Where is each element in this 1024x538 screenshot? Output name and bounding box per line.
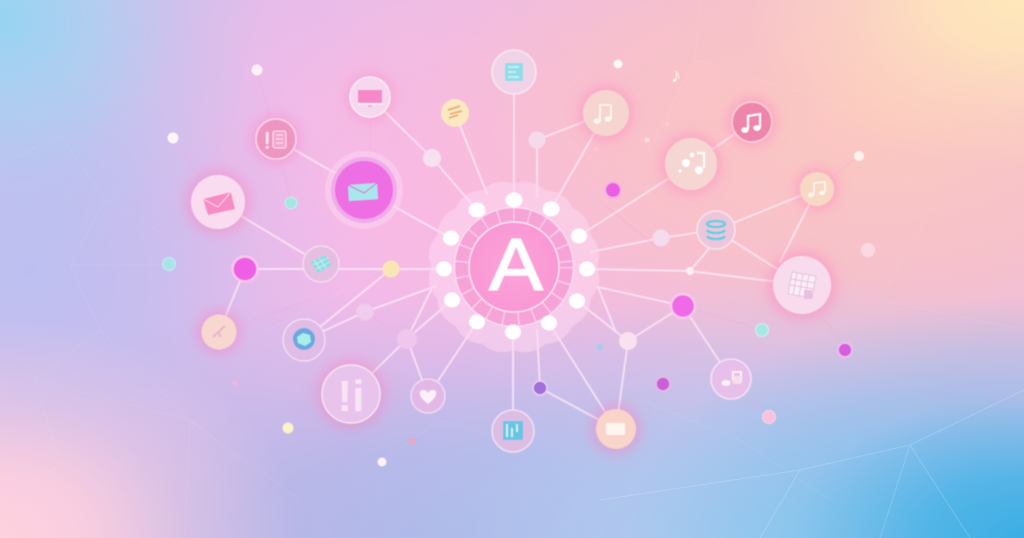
- central hub: [429, 182, 599, 352]
- small accent dots: [162, 60, 875, 466]
- node: magenta upper: [605, 182, 621, 198]
- node: clipboard icon: [256, 119, 296, 159]
- node: magenta left: [232, 256, 258, 282]
- hub white nodes: [436, 192, 595, 340]
- node: peach small music: [800, 172, 834, 206]
- node: bottom book: [492, 410, 534, 452]
- hub scalloped halo: [429, 182, 599, 352]
- node: monitor: [350, 77, 390, 117]
- hub letter: A: [489, 225, 544, 306]
- node: heart: [411, 379, 445, 413]
- icon: floating music note: ♪: [671, 65, 681, 87]
- node: peach wand: [202, 314, 236, 350]
- faint secondary lines: [173, 70, 859, 417]
- node: calendar large: [773, 256, 831, 314]
- node: database stack: [697, 211, 735, 249]
- connector lines: [218, 72, 817, 431]
- node: yellow icon: [441, 99, 469, 127]
- node: large mail: [325, 151, 403, 229]
- node: pink mail: [191, 175, 245, 229]
- node: pink music: [732, 102, 772, 142]
- node: purple music: [711, 359, 751, 399]
- node: magenta right: [671, 294, 695, 318]
- node: exclamation info: [322, 365, 380, 423]
- node: grid icon: [303, 246, 339, 282]
- node: top book icon: [492, 50, 536, 94]
- node: exclamation info: !i: [338, 372, 364, 421]
- faint lower-right network lines: [600, 390, 1024, 538]
- node: yellow junction: [382, 260, 400, 278]
- node: peach bottom: [596, 409, 636, 449]
- network diagram: [162, 50, 875, 466]
- hub segmented ring: [454, 208, 574, 326]
- node glows: [187, 75, 837, 453]
- node: peach music: [583, 90, 629, 136]
- hub disc: [469, 222, 559, 312]
- node: large music: [665, 138, 717, 190]
- node: teal flower: [283, 319, 325, 361]
